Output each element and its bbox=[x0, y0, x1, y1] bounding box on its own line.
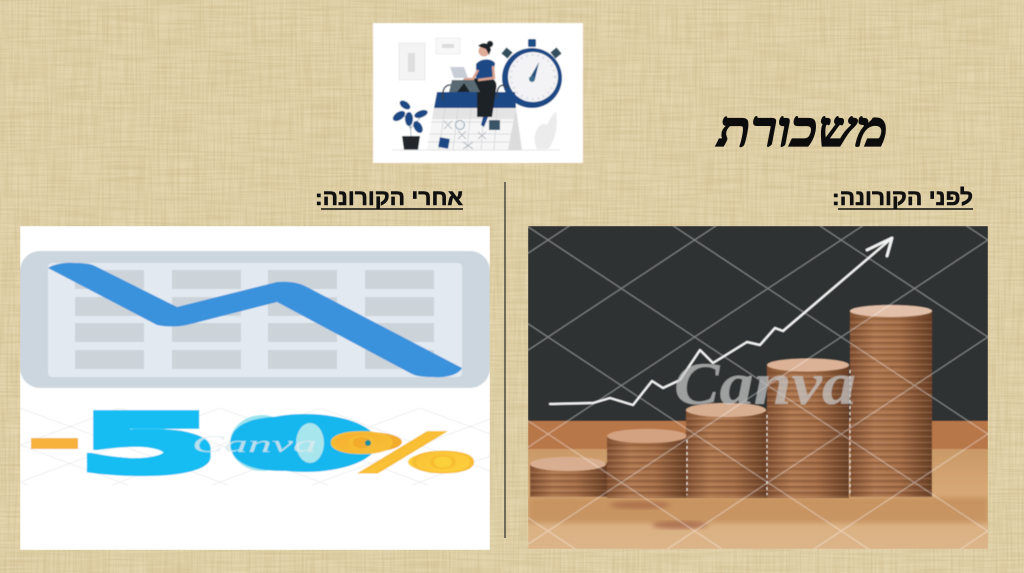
icon: ghost plant bbox=[535, 112, 557, 149]
heading: before corona: לפני הקורונה: bbox=[832, 185, 973, 210]
callout: minus 50 percent: 5 bbox=[72, 399, 224, 490]
heading: after corona: אחרי הקורונה: bbox=[315, 185, 463, 210]
panel: after corona, falling chart and minus 50 percent bbox=[20, 226, 490, 550]
icon: woman with laptop bbox=[449, 41, 497, 127]
callout: minus 50 percent: % bbox=[328, 422, 477, 485]
chart: table card bbox=[20, 251, 490, 388]
photo backdrop: chalkboard and wood table bbox=[528, 226, 988, 549]
panel: before corona, coins and rising arrow bbox=[528, 226, 988, 549]
divider line bbox=[504, 182, 506, 538]
chart: falling blue line bbox=[48, 263, 462, 377]
watermark: Canva script and lattice bbox=[528, 226, 988, 549]
callout: minus 50 percent: Canva bbox=[192, 432, 317, 458]
icon: potted plant bbox=[391, 99, 429, 150]
icon: calendar bbox=[427, 85, 522, 150]
chart: coin stacks bbox=[530, 305, 932, 498]
watermark: Canva script and lattice: Canva bbox=[674, 351, 856, 417]
icon: stopwatch bbox=[501, 39, 562, 108]
chart: white rising arrow bbox=[550, 238, 892, 405]
icon: faint wall frames bbox=[399, 38, 460, 80]
title: משכורת bbox=[716, 101, 888, 157]
illustration: woman working on calendar with stopwatch bbox=[373, 23, 583, 163]
callout: minus 50 percent bbox=[20, 408, 490, 485]
callout: minus 50 percent: 0 bbox=[222, 404, 342, 487]
